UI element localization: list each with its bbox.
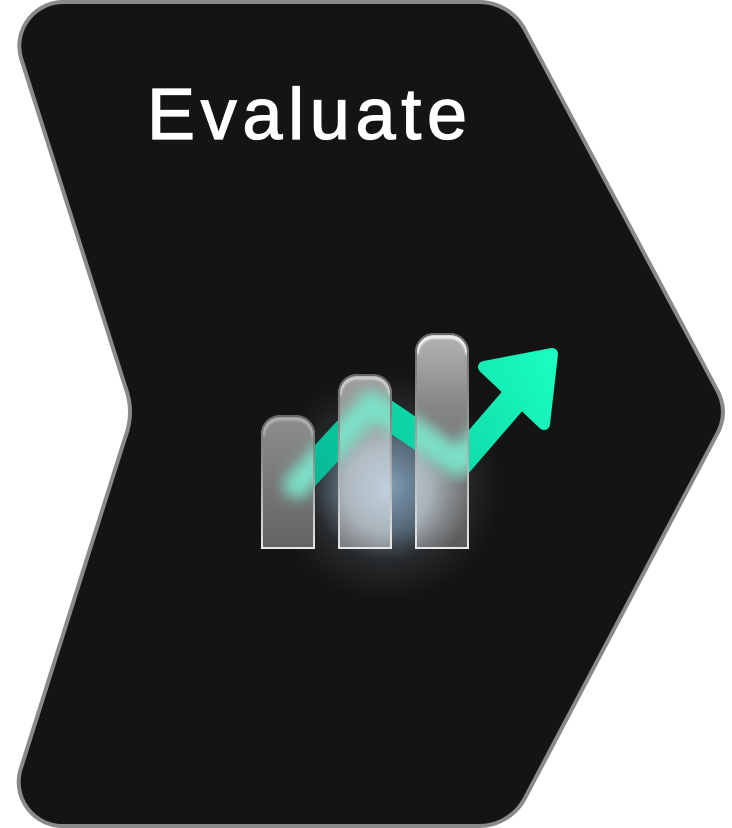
icon: bar chart with rising arrow	[261, 333, 552, 601]
heading: Evaluate: Evaluate	[147, 75, 467, 155]
bar 1	[261, 415, 315, 549]
bar 3	[415, 333, 469, 549]
soft blue glow behind bars	[271, 371, 501, 601]
arrow: rising trend line	[297, 354, 552, 485]
bar 2	[338, 374, 392, 549]
